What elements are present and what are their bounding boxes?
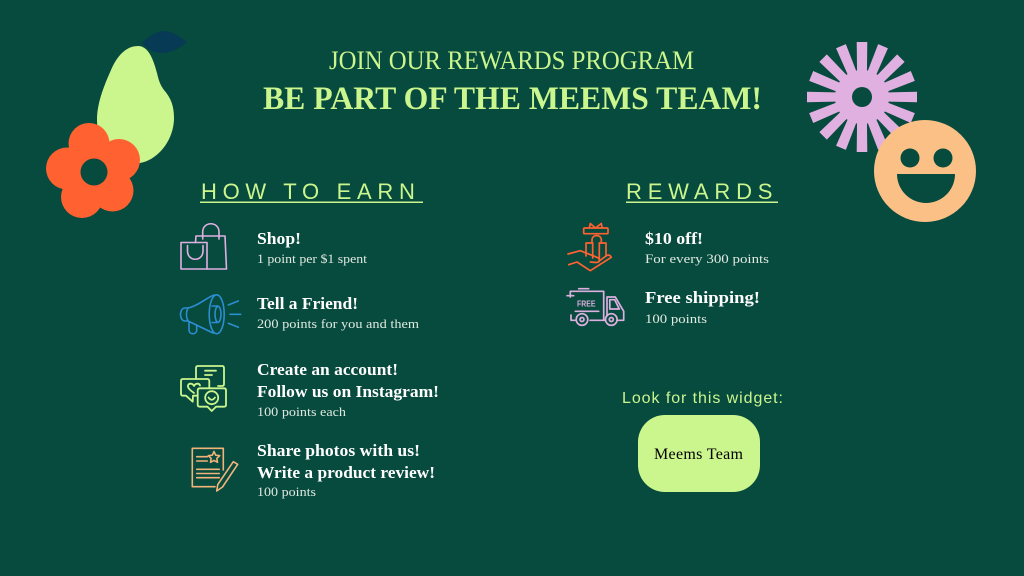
icon: shopping bags [181,224,226,269]
icon: smiley face [874,120,976,222]
text: share photos: 100 points [257,484,316,499]
text: ten dollars off: For every 300 points [645,251,769,266]
text: create an account: 100 points each [257,404,347,419]
text: free shipping [645,288,760,326]
text: tell a friend: 200 points for you and them [257,316,419,331]
text: shop: 1 point per $1 spent [257,251,367,266]
text: tell a friend [257,294,419,331]
text: shop: Shop! [257,229,301,248]
icon: pink sunburst [807,42,917,152]
text: free shipping: 100 points [645,311,707,326]
text: look for this widget: Look for this widget: [622,390,783,407]
icon: megaphone [180,295,241,334]
widget button: Meems Team [654,446,744,463]
icon: chat bubbles [181,366,226,411]
icon: gift in hand [568,224,611,271]
icon: delivery truck: FREE [577,298,596,308]
heading: how to earn: HOW TO EARN [201,179,421,204]
text: free shipping: Free shipping! [645,288,760,307]
text: share photos [257,441,435,499]
text: share photos: Share photos with us! [257,441,420,460]
text: tell a friend: Tell a Friend! [257,294,358,313]
text: ten dollars off: $10 off! [645,229,703,248]
text: create an account [257,360,439,419]
heading: rewards: REWARDS [626,179,778,204]
title: BE PART OF THE MEEMS TEAM! [263,81,762,117]
text: ten dollars off [645,229,769,266]
icon: pear [97,31,187,163]
title [263,46,762,117]
icon: document and pencil [192,448,238,491]
title: JOIN OUR REWARDS PROGRAM [329,46,694,75]
icon: orange flower [46,123,140,218]
icon: delivery truck [567,289,624,325]
text: shop [257,229,367,266]
text: create an account: Follow us on Instagram! [257,382,439,401]
text: share photos: Write a product review! [257,463,435,482]
text: create an account: Create an account! [257,360,398,379]
widget button [638,415,760,492]
